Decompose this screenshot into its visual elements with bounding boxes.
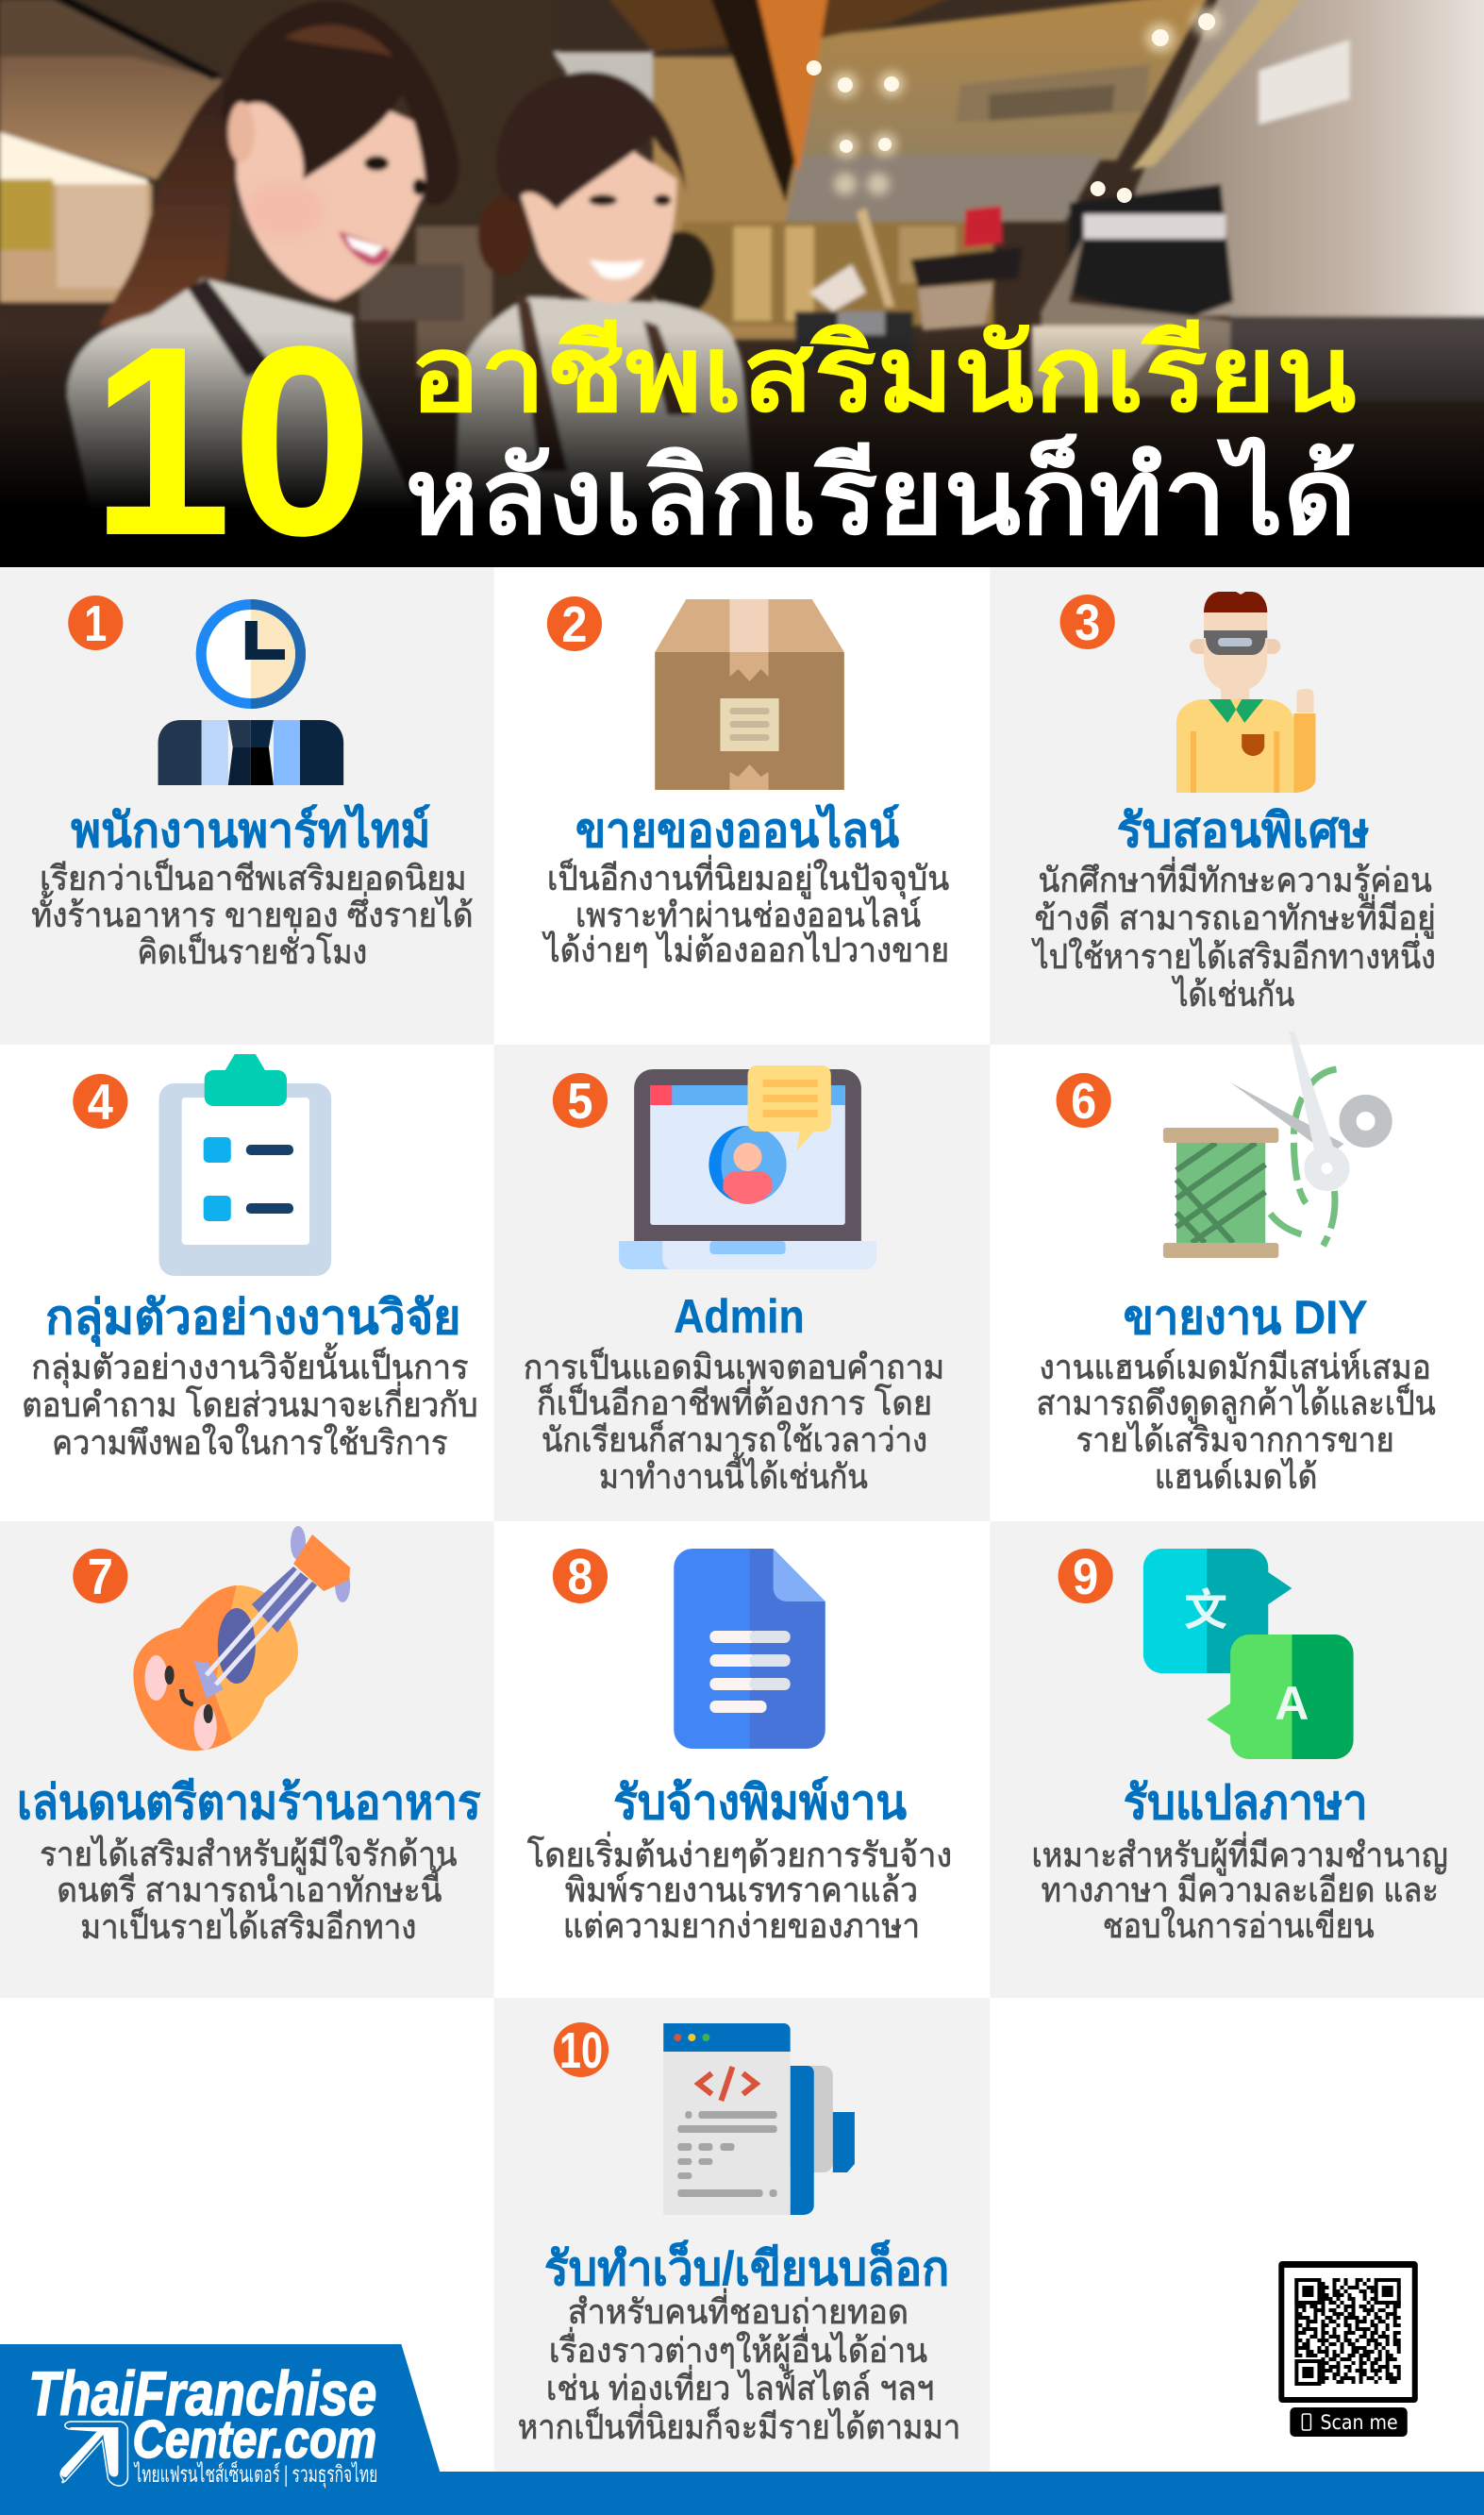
- body text: มาเป็นรายได้เสริมอีกทาง: [80, 1905, 416, 1946]
- number badge 9: 9: [1073, 1549, 1098, 1605]
- number badge 7: [73, 1549, 127, 1605]
- body text: ได้เช่นกัน: [1171, 975, 1294, 1014]
- body text: [1031, 1832, 1448, 1945]
- body text: เช่น ท่องเที่ยว ไลฟ์สไตล์ ฯลฯ: [546, 2365, 934, 2407]
- body text: ทางภาษา มีความละเอียด และ: [1042, 1870, 1439, 1909]
- heading: DIY: ขายงาน DIY: [1124, 1291, 1368, 1344]
- QR code: [1278, 2261, 1418, 2403]
- logo: ThaiFranchise Center: ThaiFranchise: [28, 2359, 376, 2429]
- body text: การเป็นแอดมินเพจตอบคำถาม: [524, 1346, 944, 1386]
- icon: tutor with glasses: [1176, 592, 1315, 793]
- number badge 3: [1060, 595, 1115, 651]
- body text: [524, 1346, 944, 1496]
- body text: [1036, 1348, 1436, 1496]
- body text: เหมาะสำหรับผู้ที่มีความชำนาญ: [1031, 1832, 1448, 1876]
- body text: คิดเป็นรายชั่วโมง: [137, 929, 367, 971]
- title line 2: หลังเลิกเรียนก็ทำได้: [405, 433, 1357, 556]
- body text: ข้างดี สามารถเอาทักษะที่มีอยู่: [1034, 895, 1436, 939]
- number badge 6: 6: [1071, 1073, 1096, 1130]
- scan me button: Scan me: [1320, 2410, 1398, 2434]
- panel: card 4 research sample: [0, 1045, 494, 1521]
- number badge 2: 2: [561, 596, 587, 653]
- number badge 4: 4: [88, 1074, 113, 1131]
- body text: เพราะทำผ่านช่องออนไลน์: [575, 896, 921, 934]
- body text: รายได้เสริมสำหรับผู้มีใจรักด้าน: [40, 1835, 458, 1875]
- panel: card 10 website and blog: [494, 1998, 990, 2472]
- icon: thread spool and scissors: [1163, 1031, 1384, 1258]
- logo: ThaiFranchise Center: Center.com: [132, 2409, 376, 2470]
- body text: โดยเริ่มต้นง่ายๆด้วยการรับจ้าง: [527, 1832, 952, 1874]
- body text: ความพึงพอใจในการใช้บริการ: [52, 1423, 448, 1462]
- body text: [527, 1832, 952, 1945]
- icon: laptop with chat bubble: [619, 1065, 876, 1269]
- number badge 2: [547, 596, 602, 653]
- heading: Admin: Admin: [674, 1290, 805, 1343]
- body text: ตอบคำถาม โดยส่วนมาจะเกี่ยวกับ: [22, 1382, 478, 1424]
- woman 2: [478, 196, 531, 276]
- body text: มาทำงานนี้ได้เช่นกัน: [599, 1451, 868, 1496]
- icon: clipboard: [159, 1054, 331, 1276]
- number badge 8: [553, 1549, 608, 1605]
- body text: สามารถดึงดูดลูกค้าได้และเป็น: [1036, 1382, 1436, 1424]
- body text: [40, 1835, 458, 1946]
- number badge 6: [1057, 1073, 1111, 1130]
- body text: เรียกว่าเป็นอาชีพเสริมยอดนิยม: [40, 857, 467, 897]
- body text: หากเป็นที่นิยมก็จะมีรายได้ตามมา: [518, 2404, 960, 2446]
- number badge 10: 10: [559, 2022, 603, 2079]
- body text: นักศึกษาที่มีทักษะความรู้ค่อน: [1038, 857, 1432, 901]
- number badge 4: [73, 1074, 127, 1131]
- body text: นักเรียนก็สามารถใช้เวลาว่าง: [542, 1418, 927, 1459]
- logo: ThaiFranchise Center: [0, 2344, 440, 2515]
- icon: logo arrow: [60, 2422, 127, 2486]
- heading: online selling: ขายของออนไลน์: [575, 803, 900, 857]
- body text: [31, 857, 474, 971]
- panel: card 2 online selling: [494, 567, 990, 1045]
- panel: card 1 part-time staff: [0, 567, 494, 1045]
- number badge 5: 5: [567, 1073, 592, 1130]
- heading: music: เล่นดนตรีตามร้านอาหาร: [17, 1776, 481, 1829]
- body text: ดนตรี สามารถนำเอาทักษะนี้: [57, 1865, 442, 1909]
- body text: [1031, 857, 1436, 1014]
- icon: clock head with suit: [158, 599, 343, 785]
- heading: translation: รับแปลภาษา: [1124, 1776, 1368, 1829]
- body text: [518, 2289, 960, 2446]
- title: 10: 10: [91, 290, 373, 592]
- panel: card 5 admin: [494, 1045, 990, 1521]
- icon: cardboard box: [655, 599, 844, 790]
- title line 1: อาชีพเสริมนักเรียน: [409, 314, 1357, 433]
- panel: card 3 tutoring: [990, 567, 1484, 1045]
- logo: ThaiFranchise Center: ไทยแฟรนไชส์เซ็นเตอร์ | รวมธุรกิจไทย: [133, 2460, 377, 2489]
- footer bar: [0, 2472, 1484, 2515]
- body text: [22, 1342, 478, 1462]
- body text: แต่ความยากง่ายของภาษา: [563, 1906, 920, 1945]
- panel: card 8 typing: [494, 1521, 990, 1998]
- body text: [542, 855, 949, 969]
- body text: ไปใช้หารายได้เสริมอีกทางหนึ่ง: [1031, 933, 1436, 976]
- number badge 8: 8: [567, 1549, 592, 1605]
- panel: card 7 music: [0, 1521, 494, 1998]
- icon: translation bubbles: A: [1275, 1677, 1309, 1730]
- number badge 5: [553, 1073, 608, 1130]
- header photo: two smiling restaurant staff: [0, 0, 1484, 567]
- number badge 1: 1: [84, 595, 107, 652]
- icon: translation bubbles: [1143, 1549, 1354, 1759]
- number badge 1: [68, 595, 123, 652]
- body text: ก็เป็นอีกอาชีพที่ต้องการ โดย: [537, 1380, 932, 1422]
- body text: งานแฮนด์เมดมักมีเสน่ห์เสมอ: [1040, 1348, 1431, 1386]
- scan me button: [1290, 2407, 1408, 2437]
- woman 1: [99, 80, 237, 326]
- body text: ทั้งร้านอาหาร ขายของ ซึ่งรายได้: [31, 890, 474, 934]
- number badge 7: 7: [88, 1549, 113, 1605]
- body text: พิมพ์รายงานเรทราคาแล้ว: [565, 1870, 918, 1909]
- heading: research sample: กลุ่มตัวอย่างงานวิจัย: [45, 1291, 461, 1347]
- icon: translation bubbles: 文: [1184, 1576, 1227, 1638]
- body text: รายได้เสริมจากการขาย: [1076, 1420, 1394, 1459]
- icon: code document: [663, 2023, 855, 2215]
- heading: website and blog: รับทำเว็บ/เขียนบล็อก: [544, 2239, 949, 2295]
- body text: ได้ง่ายๆ ไม่ต้องออกไปวางขาย: [542, 931, 949, 969]
- body text: เป็นอีกงานที่นิยมอยู่ในปัจจุบัน: [547, 855, 949, 899]
- number badge 3: 3: [1075, 595, 1100, 651]
- body text: แฮนด์เมดได้: [1155, 1457, 1317, 1496]
- heading: typing: รับจ้างพิมพ์งาน: [613, 1775, 907, 1829]
- number badge 9: [1059, 1549, 1113, 1605]
- body text: ชอบในการอ่านเขียน: [1103, 1906, 1375, 1945]
- panel: card 6 DIY: [990, 1031, 1484, 1521]
- body text: กลุ่มตัวอย่างงานวิจัยนั้นเป็นการ: [31, 1342, 469, 1388]
- icon: document: [674, 1549, 825, 1749]
- icon: cute guitar: [133, 1526, 350, 1751]
- heading: tutoring: รับสอนพิเศษ: [1117, 804, 1370, 857]
- body text: เรื่องราวต่างๆให้ผู้อื่นได้อ่าน: [549, 2327, 927, 2372]
- body text: สำหรับคนที่ชอบถ่ายทอด: [568, 2289, 909, 2331]
- panel: card 9 translation: [990, 1521, 1484, 1998]
- heading: part-time staff: พนักงานพาร์ทไทม์: [71, 803, 430, 857]
